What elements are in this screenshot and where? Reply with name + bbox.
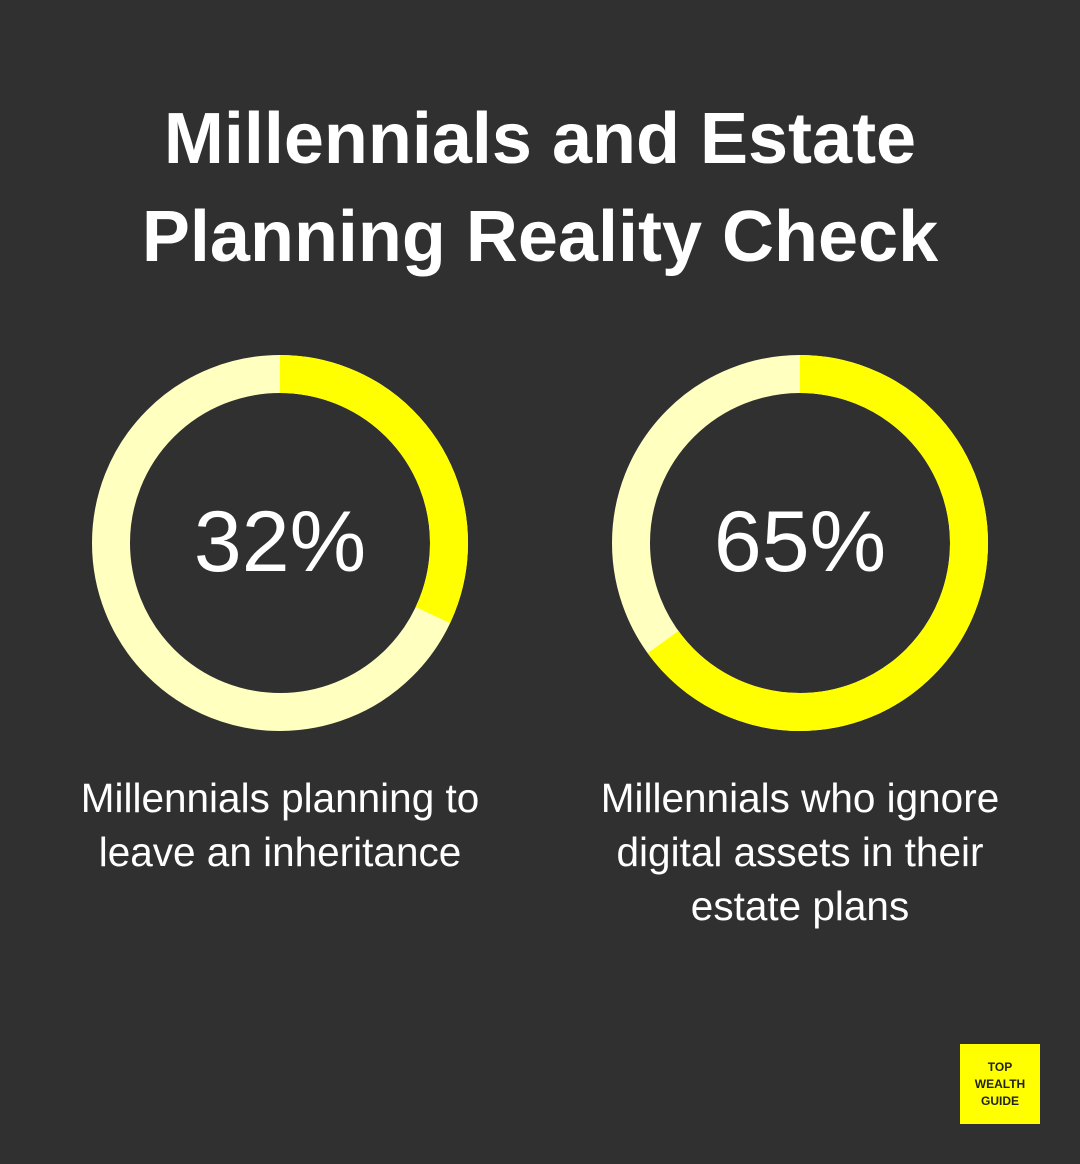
logo: TOP xyxy=(988,1060,1012,1074)
donut chart: 65% xyxy=(612,355,988,731)
label: right stat: digital assets in their xyxy=(617,829,983,875)
logo: WEALTH xyxy=(975,1077,1025,1091)
label: right stat: Millennials who ignore xyxy=(601,775,999,821)
donut chart: 32% xyxy=(92,355,468,731)
logo xyxy=(960,1044,1040,1124)
label: left stat: leave an inheritance xyxy=(99,829,461,875)
logo: GUIDE xyxy=(981,1094,1019,1108)
label: left stat xyxy=(81,775,479,875)
label: right stat: estate plans xyxy=(691,883,909,929)
donut chart: 65%: 65% xyxy=(714,494,886,590)
label: left stat: Millennials planning to xyxy=(81,775,479,821)
label: right stat xyxy=(601,775,999,929)
title xyxy=(142,99,938,277)
title: Planning Reality Check xyxy=(142,197,938,277)
donut chart: 32%: 32% xyxy=(194,494,366,590)
title: Millennials and Estate xyxy=(164,99,916,179)
